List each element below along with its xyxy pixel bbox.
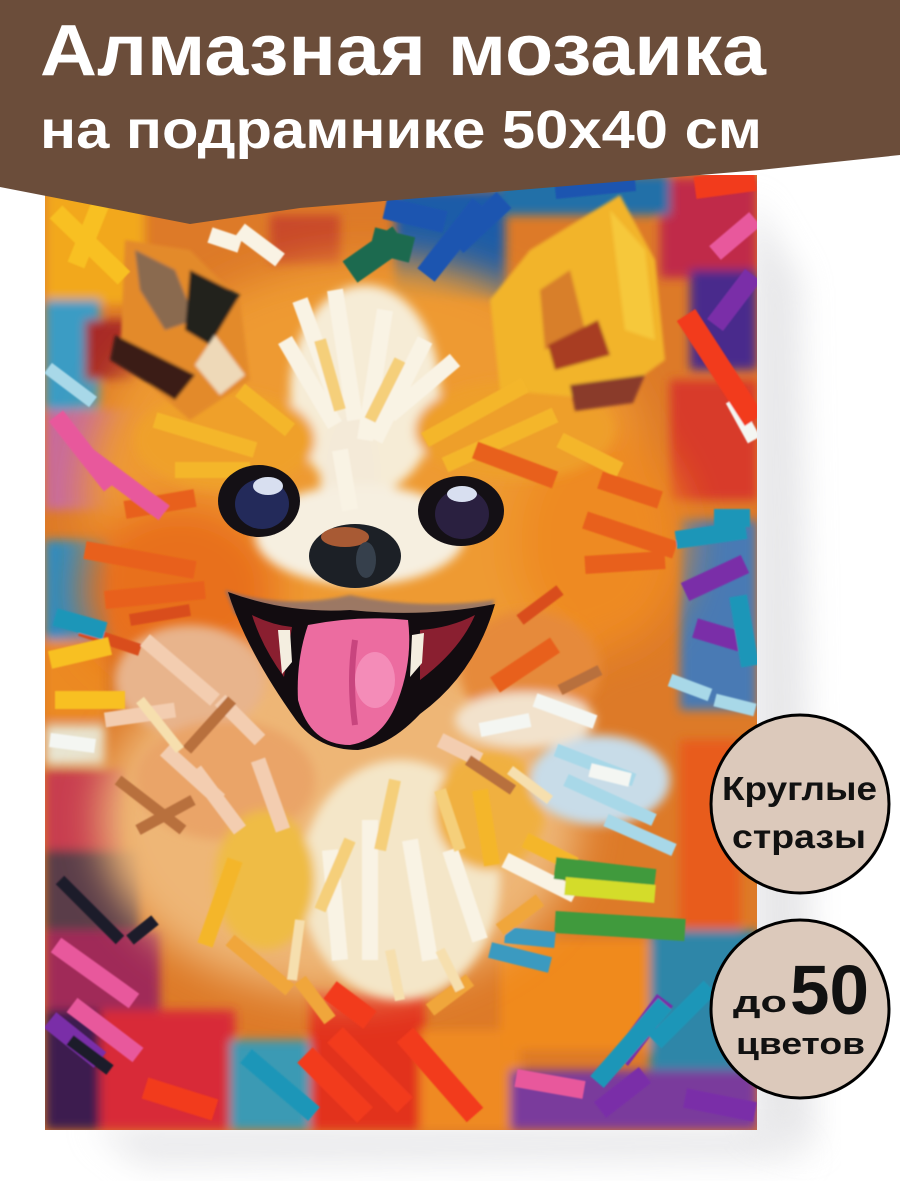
right eye [418,476,504,546]
dog fur base [80,260,685,995]
right ear [490,195,665,411]
badge: round rhinestones [711,715,889,893]
left ear [110,240,250,420]
painting: dog on colourful canvas [45,175,757,1130]
eyes [218,465,504,546]
painting background [45,175,757,1130]
muzzle shadow [225,590,495,620]
badge: round rhinestones: стразы [732,818,866,855]
left eye [218,465,300,537]
badge: up to 50 colours [711,920,889,1098]
badge: round rhinestones: Круглые [722,770,877,807]
palette knife strokes [48,180,755,1115]
badge: up to 50 colours: до [733,984,787,1019]
title [40,11,767,160]
mouth [228,592,495,750]
title line 2: на подрамнике 50х40 см [40,100,762,160]
canvas drop shadow [90,1125,810,1165]
fur colour patches [115,285,670,1000]
badge: up to 50 colours: цветов [736,1026,865,1061]
ears [110,195,665,420]
tongue [298,618,409,745]
title line 1: Алмазная мозаика [40,11,767,91]
background colour masses [45,175,757,1130]
canvas side shadow [750,195,815,1150]
header banner [0,0,900,224]
nose [309,524,401,588]
badge: up to 50 colours: 50 [790,951,869,1029]
